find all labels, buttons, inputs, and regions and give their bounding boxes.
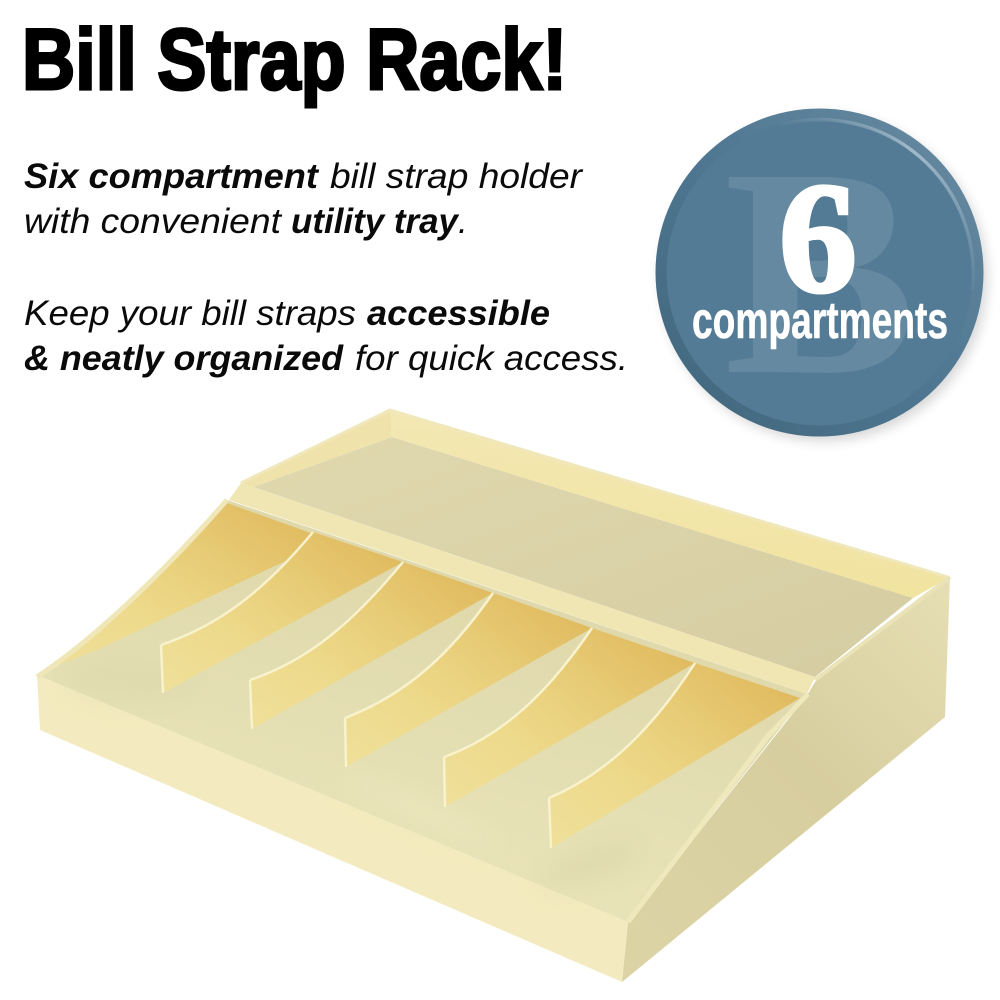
rack floor reflections <box>70 662 641 893</box>
product: bill strap rack <box>37 409 950 982</box>
rack left wall inner face <box>50 503 330 668</box>
text block: description <box>24 157 583 241</box>
badge: 6 compartments <box>656 107 987 441</box>
rack right side wall <box>622 577 950 982</box>
rack floor <box>37 500 807 922</box>
badge watermark letter: B <box>724 107 916 437</box>
text block: description: with convenient <box>24 202 282 241</box>
shelf front bar <box>229 483 815 694</box>
tray back lip <box>390 409 950 598</box>
text block: description: utility tray <box>291 202 460 241</box>
text block: description: Six compartment <box>24 157 319 196</box>
tray rim highlight <box>241 410 948 577</box>
divider 2 <box>250 562 493 729</box>
divider 5 <box>549 663 800 848</box>
divider 3 <box>345 593 592 767</box>
title: Bill Strap Rack! <box>22 12 567 108</box>
text block: benefit: & neatly organized <box>24 339 344 378</box>
text block: description: . <box>458 202 468 241</box>
rack left wall lip <box>37 500 227 677</box>
divider 4 <box>444 628 695 807</box>
divider 1 <box>161 532 403 693</box>
rack right wall lip <box>628 694 808 922</box>
text block: benefit <box>24 294 628 378</box>
tray surface <box>253 437 913 677</box>
badge number: 6 <box>779 151 857 326</box>
tray left lip <box>241 409 392 487</box>
text block: benefit: Keep your bill straps <box>24 294 356 333</box>
tray right rim <box>815 577 950 680</box>
text block: benefit: accessible <box>367 294 550 333</box>
rack front face <box>37 675 628 982</box>
text block: benefit: for quick access. <box>355 339 628 378</box>
text block: description: bill strap holder <box>330 157 583 196</box>
